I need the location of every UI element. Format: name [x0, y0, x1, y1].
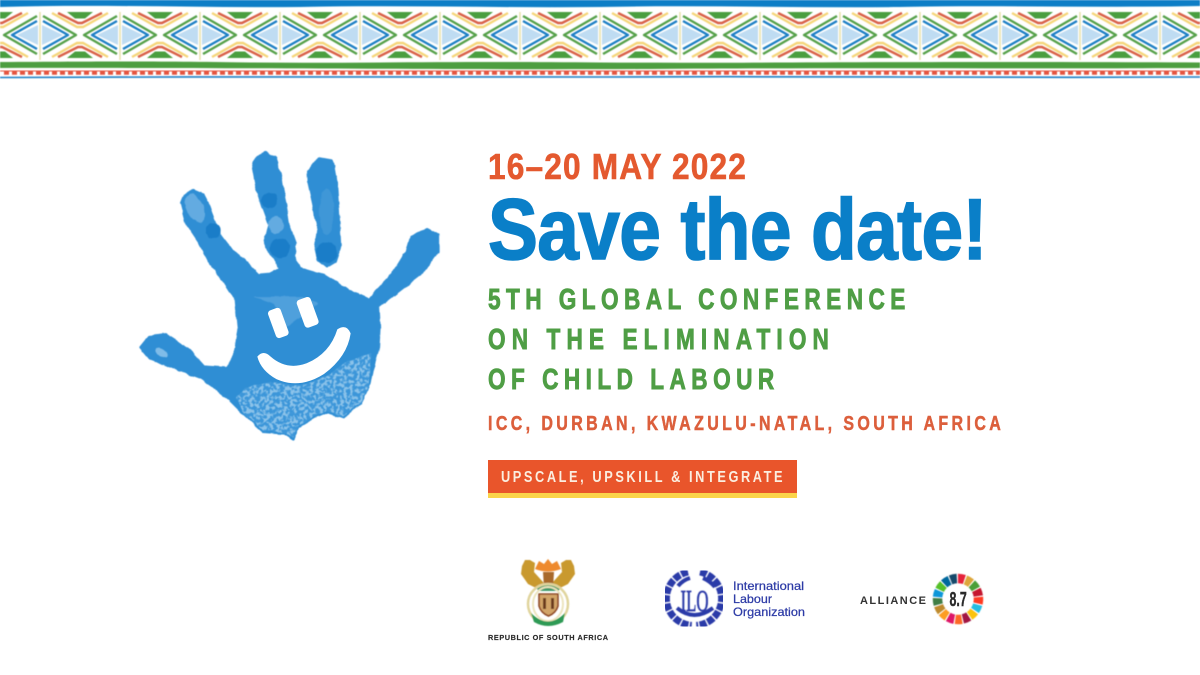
decorative top banner — [0, 0, 1200, 78]
name line 2: Labour — [733, 592, 772, 606]
right wing — [549, 560, 575, 589]
title line 3: OF CHILD LABOUR — [488, 362, 774, 396]
wheel number: 8.7 — [950, 588, 967, 611]
sdg colour wheel — [929, 570, 987, 628]
title line 2: ON THE ELIMINATION — [488, 322, 829, 356]
motto band — [531, 613, 565, 626]
name line 1: International — [733, 579, 804, 593]
painted hand body — [141, 153, 437, 439]
smile — [257, 327, 351, 383]
name line 3: Organization — [733, 605, 805, 619]
wrist texture — [236, 353, 372, 438]
hand outline with palm and four connected fingers — [141, 153, 437, 439]
left eye — [267, 307, 290, 339]
icon: blue child handprint with smile — [141, 153, 437, 439]
venue: ICC, DURBAN, KWAZULU-NATAL, SOUTH AFRICA — [488, 412, 1001, 434]
date line: 16–20 MAY 2022 — [488, 147, 746, 187]
logo: international labour organization — [666, 572, 722, 625]
title line 1: 5TH GLOBAL CONFERENCE — [488, 282, 905, 316]
right eye — [296, 296, 320, 329]
theme tag: UPSCALE, UPSKILL & INTEGRATE — [501, 469, 783, 486]
shield — [539, 594, 558, 616]
gear arcs — [677, 578, 715, 615]
logo caption: republic of south africa: REPUBLIC OF SOUTH AFRICA — [488, 633, 609, 642]
logo: alliance 8.7 — [860, 570, 987, 628]
finger light patches — [154, 188, 334, 360]
theme tag — [488, 460, 797, 498]
laurel wreath — [666, 572, 722, 625]
print dark spots — [206, 193, 337, 263]
conference title — [488, 282, 905, 396]
wrist light base — [236, 353, 372, 438]
heading: save the date: Save the date! — [488, 182, 987, 278]
separate finger — [308, 158, 340, 267]
ILO letters: ILO — [680, 583, 708, 618]
alliance word: ALLIANCE — [860, 595, 926, 607]
logo text: international labour organization — [733, 579, 805, 619]
green band — [537, 585, 560, 591]
logo: republic of south africa coat of arms — [521, 559, 575, 626]
shield figures — [543, 598, 554, 609]
bird body — [543, 572, 554, 588]
outer oval ring — [528, 584, 568, 624]
left wing — [521, 560, 547, 589]
inner oval ring — [533, 587, 563, 621]
sun — [535, 559, 561, 572]
